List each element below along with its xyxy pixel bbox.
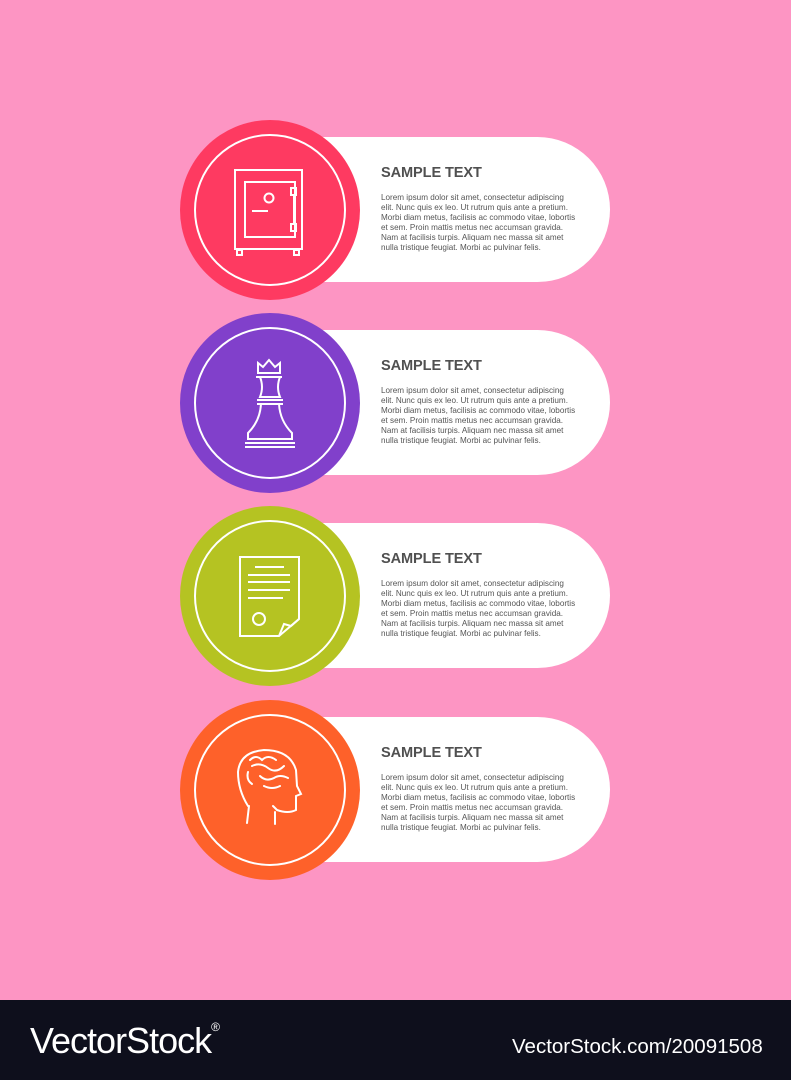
text block: [381, 357, 575, 445]
icon: brain head circle: [180, 700, 360, 880]
text block: Morbi diam metus, facilisis ac commodo vitae, lobortis: [381, 599, 575, 608]
text block: et sem. Proin mattis metus nec accumsan gravida.: [381, 609, 563, 618]
text block: nulla tristique feugiat. Morbi ac pulvinar felis.: [381, 823, 541, 832]
icon: safe circle: [180, 120, 360, 300]
icon: chess queen circle: [180, 313, 360, 493]
text block: Morbi diam metus, facilisis ac commodo vitae, lobortis: [381, 213, 575, 222]
footer url: VectorStock.com/20091508: [512, 1035, 763, 1058]
white pill: [290, 330, 610, 475]
text block: Nam at facilisis turpis. Aliquam nec massa sit amet: [381, 813, 563, 822]
text block: Nam at facilisis turpis. Aliquam nec massa sit amet: [381, 426, 563, 435]
text block: et sem. Proin mattis metus nec accumsan gravida.: [381, 416, 563, 425]
text block: et sem. Proin mattis metus nec accumsan gravida.: [381, 803, 563, 812]
text block: Morbi diam metus, facilisis ac commodo vitae, lobortis: [381, 406, 575, 415]
white pill: [290, 717, 610, 862]
text block: elit. Nunc quis ex leo. Ut rutrum quis ante a pretium.: [381, 589, 568, 598]
white pill: [290, 137, 610, 282]
text block: et sem. Proin mattis metus nec accumsan gravida.: [381, 223, 563, 232]
row 3: document: [180, 506, 610, 686]
text block: nulla tristique feugiat. Morbi ac pulvinar felis.: [381, 436, 541, 445]
text block: nulla tristique feugiat. Morbi ac pulvinar felis.: [381, 243, 541, 252]
white pill: [290, 523, 610, 668]
text block: SAMPLE TEXT: [381, 550, 482, 567]
text block: elit. Nunc quis ex leo. Ut rutrum quis ante a pretium.: [381, 203, 568, 212]
text block: [381, 744, 575, 832]
text block: Nam at facilisis turpis. Aliquam nec massa sit amet: [381, 619, 563, 628]
text block: Lorem ipsum dolor sit amet, consectetur adipiscing: [381, 193, 564, 202]
footer logo: VectorStock®: [30, 1020, 219, 1061]
text block: [381, 550, 575, 638]
text block: SAMPLE TEXT: [381, 744, 482, 761]
text block: Nam at facilisis turpis. Aliquam nec massa sit amet: [381, 233, 563, 242]
icon: document circle: [180, 506, 360, 686]
text block: Lorem ipsum dolor sit amet, consectetur adipiscing: [381, 773, 564, 782]
text block: elit. Nunc quis ex leo. Ut rutrum quis ante a pretium.: [381, 783, 568, 792]
text block: Morbi diam metus, facilisis ac commodo vitae, lobortis: [381, 793, 575, 802]
text block: Lorem ipsum dolor sit amet, consectetur adipiscing: [381, 579, 564, 588]
row 4: head: [180, 700, 610, 880]
text block: Lorem ipsum dolor sit amet, consectetur adipiscing: [381, 386, 564, 395]
row 1: safe: [180, 120, 610, 300]
text block: [381, 164, 575, 252]
footer bar: [0, 1000, 791, 1080]
text block: elit. Nunc quis ex leo. Ut rutrum quis ante a pretium.: [381, 396, 568, 405]
text block: nulla tristique feugiat. Morbi ac pulvinar felis.: [381, 629, 541, 638]
text block: SAMPLE TEXT: [381, 357, 482, 374]
row 2: chess: [180, 313, 610, 493]
text block: SAMPLE TEXT: [381, 164, 482, 181]
